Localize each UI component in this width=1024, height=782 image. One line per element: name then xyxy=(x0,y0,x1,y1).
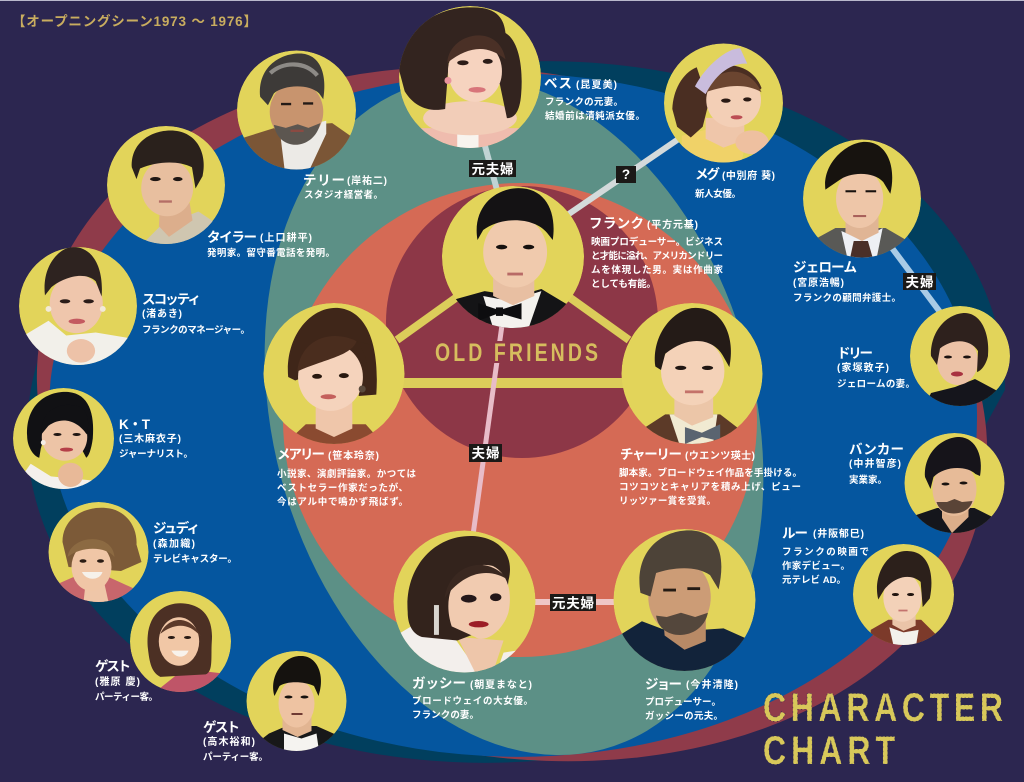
text: Banker: (中井智彦) xyxy=(849,457,901,470)
relationship label: Frank and Gussie couple: 夫婦 xyxy=(472,445,500,461)
text: Dolly: ドリー xyxy=(837,346,873,361)
text: Mary xyxy=(277,447,416,508)
text: Guest Masahara: パーティー客。 xyxy=(95,691,158,703)
portrait: Scotty xyxy=(19,247,137,365)
text: Frank: と才能に溢れ、アメリカンドリー xyxy=(591,250,723,262)
text: Guest Takagi xyxy=(203,719,268,763)
text: Gussie: ガッシー xyxy=(412,676,466,691)
text: Jerome: (宮原浩暢) xyxy=(793,276,844,289)
text: Frank xyxy=(589,216,723,290)
portrait: Terry xyxy=(237,50,356,169)
text: Judy: テレビキャスター。 xyxy=(153,553,237,565)
portrait: Frank xyxy=(442,186,584,328)
connector: Frank to Meg xyxy=(560,138,680,220)
text: Charlie: コツコツとキャリアを積み上げ、ピュー xyxy=(619,481,801,493)
text: K・T: K・T xyxy=(119,417,151,432)
text: Charlie xyxy=(619,447,802,507)
text: Taylor: 発明家。留守番電話を発明。 xyxy=(207,247,335,259)
text: Guest Masahara xyxy=(95,658,158,703)
text: Charlie: リッツァー賞を受賞。 xyxy=(619,495,716,507)
relationship label: Beth ex-couple: 元夫婦 xyxy=(472,161,514,177)
text: Frank: 映画プロデューサー。ビジネス xyxy=(591,236,723,248)
text: Gussie: (朝夏まなと) xyxy=(470,678,532,691)
text: Lou: 作家デビュー。 xyxy=(782,560,850,572)
portrait: Taylor xyxy=(107,126,225,244)
text: Lou: (井阪郁巳) xyxy=(813,527,864,540)
text: K・T: (三木麻衣子) xyxy=(119,432,181,445)
portrait: Dolly xyxy=(910,306,1010,406)
text: Banker: バンカー xyxy=(849,442,904,457)
text: Taylor: (上口耕平) xyxy=(260,231,312,244)
text: Dolly: ジェロームの妻。 xyxy=(837,378,915,390)
relationship label: Jerome couple: 夫婦 xyxy=(906,274,934,290)
relationship label: Meg question: ? xyxy=(622,167,630,182)
text: Guest Takagi: (高木裕和) xyxy=(203,735,255,748)
text: Judy: ジュディ xyxy=(153,520,200,536)
text: Beth: (昆夏美) xyxy=(576,78,617,91)
text: Meg: メグ xyxy=(695,166,720,182)
text: Scotty: フランクのマネージャー。 xyxy=(142,325,250,336)
text: Frank: フランク xyxy=(589,216,644,231)
portrait: Judy xyxy=(48,502,148,602)
text: Lou: フランクの映画で xyxy=(782,546,869,558)
text: Jerome: フランクの顧問弁護士。 xyxy=(793,292,901,304)
text: Guest Takagi: ゲスト xyxy=(203,719,240,735)
text: Beth: 結婚前は清純派女優。 xyxy=(545,110,645,122)
text: Lou xyxy=(782,526,869,586)
text: Guest Masahara: ゲスト xyxy=(95,658,131,674)
text: Gussie: フランクの妻。 xyxy=(412,709,479,721)
text: Scotty: (渚あき) xyxy=(142,307,182,320)
text: Joe: ガッシーの元夫。 xyxy=(645,710,723,722)
heading: character chart: CHART xyxy=(763,728,895,773)
portrait: Meg xyxy=(664,43,783,162)
text: Joe xyxy=(645,677,738,722)
text: Mary: ベストセラー作家だったが、 xyxy=(277,482,408,494)
portrait: Joe xyxy=(614,529,756,671)
text: Taylor xyxy=(207,230,335,259)
portrait: Guest, Takagi xyxy=(246,651,346,751)
connector: Frank to Beth xyxy=(485,146,497,190)
text: K・T: ジャーナリスト。 xyxy=(119,449,193,460)
text: K・T xyxy=(119,417,193,460)
text: Joe: プロデューサー。 xyxy=(645,696,721,708)
text: Lou: ルー xyxy=(782,526,808,541)
text: Gussie: ブロードウェイの大女優。 xyxy=(412,695,533,707)
text: Terry: テリー xyxy=(303,173,345,188)
text: Mary: メアリー xyxy=(277,447,325,462)
text: Dolly: (家塚敦子) xyxy=(837,361,889,374)
text: Joe: ジョー xyxy=(645,677,682,692)
text: Terry: (岸祐二) xyxy=(347,174,387,187)
text: Mary: 小説家、演劇評論家。かつては xyxy=(277,468,416,480)
text: Guest Masahara: (雅原 慶) xyxy=(95,675,140,688)
text: Judy xyxy=(153,520,237,565)
text: Lou: 元テレビ AD。 xyxy=(782,574,846,586)
heading: character chart: CHARACTER xyxy=(763,685,1003,730)
text: Jerome: ジェローム xyxy=(793,260,857,275)
text: Mary: (笹本玲奈) xyxy=(328,449,379,462)
text: Judy: (森加織) xyxy=(153,537,195,550)
portrait: K・T xyxy=(13,388,114,489)
text: Frank: ムを体現した男。実は作曲家 xyxy=(591,264,723,276)
text: Frank: (平方元基) xyxy=(647,218,698,231)
text: Frank: としても有能。 xyxy=(591,278,656,290)
text: Banker: 実業家。 xyxy=(849,474,887,486)
text: Dolly xyxy=(837,346,915,390)
relationship label: Meg question xyxy=(616,166,636,183)
connector: Frank to Gussie xyxy=(473,325,502,535)
portrait: Jerome xyxy=(803,140,921,258)
text: Beth: フランクの元妻。 xyxy=(545,96,623,108)
relationship label: Gussie and Joe ex-couple: 元夫婦 xyxy=(552,595,594,611)
portrait: Gussie xyxy=(394,530,536,672)
text: Beth: ベス xyxy=(544,76,572,91)
text: Charlie: チャーリー xyxy=(620,447,682,462)
text: Charlie: (ウエンツ瑛士) xyxy=(685,449,755,462)
heading: character chart xyxy=(763,685,1003,773)
title: opening scene: 【オープニングシーン1973 ～ 1976】 xyxy=(12,13,257,29)
text: Gussie xyxy=(412,676,533,721)
portrait: Guest, Masahara xyxy=(130,591,231,692)
portrait: Banker xyxy=(904,433,1004,533)
connector: Jerome to Dolly xyxy=(892,248,940,312)
text: Banker xyxy=(849,442,904,486)
text: Scotty: スコッティ xyxy=(142,292,201,307)
text: Scotty xyxy=(142,292,250,336)
text: Taylor: タイラー xyxy=(207,230,257,245)
text: Joe: (今井清隆) xyxy=(686,678,738,691)
text: Guest Takagi: パーティー客。 xyxy=(203,751,268,763)
text: Terry xyxy=(303,173,387,201)
portrait: Lou xyxy=(853,544,954,645)
text: Jerome xyxy=(793,260,901,304)
connector: old friends triangle xyxy=(395,297,632,383)
text: Charlie: 脚本家。ブロードウェイ作品を手掛ける。 xyxy=(619,467,802,479)
connector: Gussie to Joe xyxy=(534,599,615,605)
backing gap behind old friends heading xyxy=(430,341,605,363)
portrait: Beth xyxy=(399,6,541,149)
text: Meg xyxy=(695,166,775,200)
text: Terry: スタジオ経営者。 xyxy=(304,189,383,201)
portrait: Charlie xyxy=(622,303,762,444)
text: Beth xyxy=(544,76,645,122)
heading: old friends: OLD FRIENDS xyxy=(435,339,598,367)
text: Meg: 新人女優。 xyxy=(695,188,741,200)
text: Mary: 今はアル中で鳴かず飛ばず。 xyxy=(277,496,408,508)
portrait: Mary xyxy=(264,303,404,444)
text: Meg: (中別府 葵) xyxy=(722,169,775,182)
